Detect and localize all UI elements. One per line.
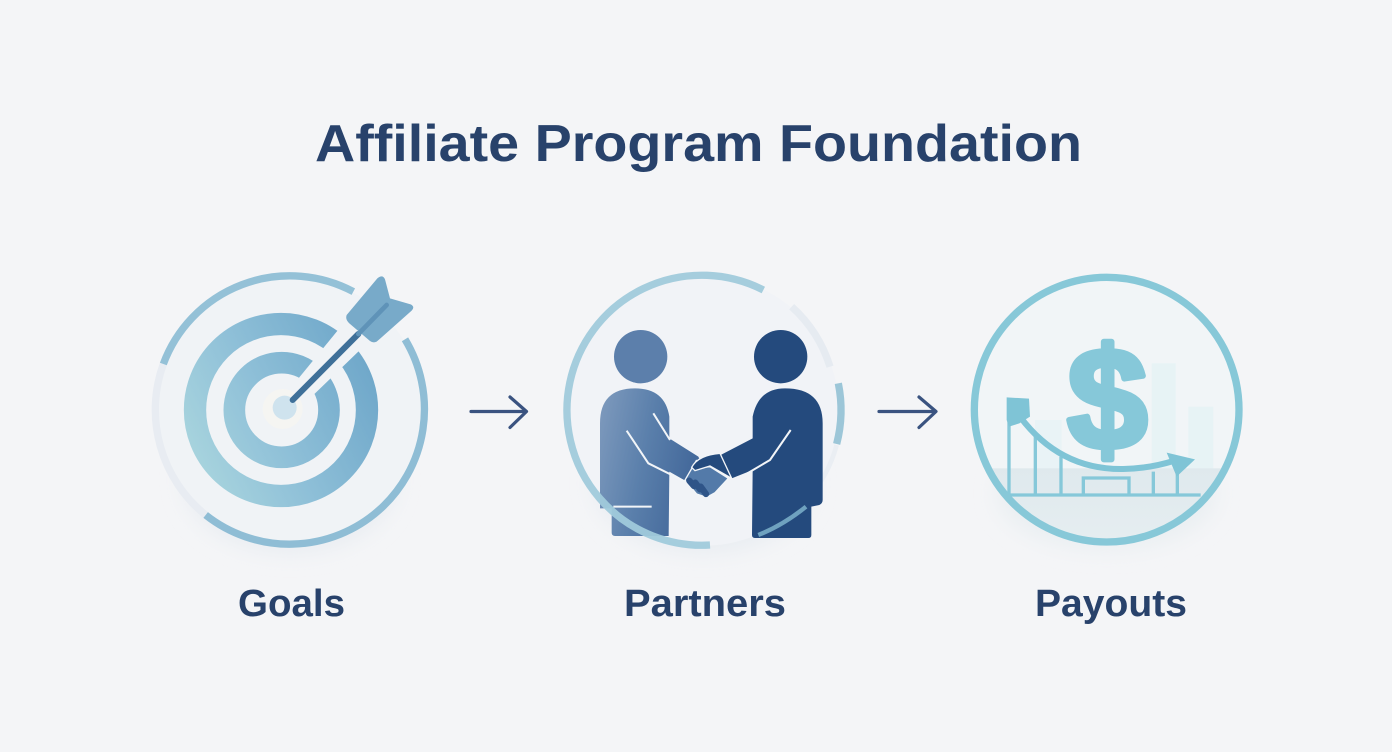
icon: target with arrow	[155, 276, 424, 553]
left person	[600, 330, 707, 536]
panel: goals	[155, 276, 424, 625]
label: Goals: Goals	[238, 583, 345, 625]
arrow: partners to payouts	[879, 397, 936, 428]
dollar sign: $	[1067, 319, 1147, 480]
panel: payouts	[970, 277, 1243, 625]
icon: dollar and chart	[970, 277, 1243, 550]
label: Partners: Partners	[624, 583, 786, 625]
title: Affiliate Program Foundation	[315, 115, 1082, 173]
icon: handshake	[567, 275, 841, 553]
label: Payouts: Payouts	[1035, 583, 1187, 625]
infographic canvas	[152, 124, 1243, 624]
growth chart	[1007, 397, 1201, 495]
panel: partners	[567, 275, 841, 625]
handshake hands	[685, 453, 732, 497]
right person	[721, 330, 823, 538]
arrow: goals to partners	[471, 397, 526, 428]
